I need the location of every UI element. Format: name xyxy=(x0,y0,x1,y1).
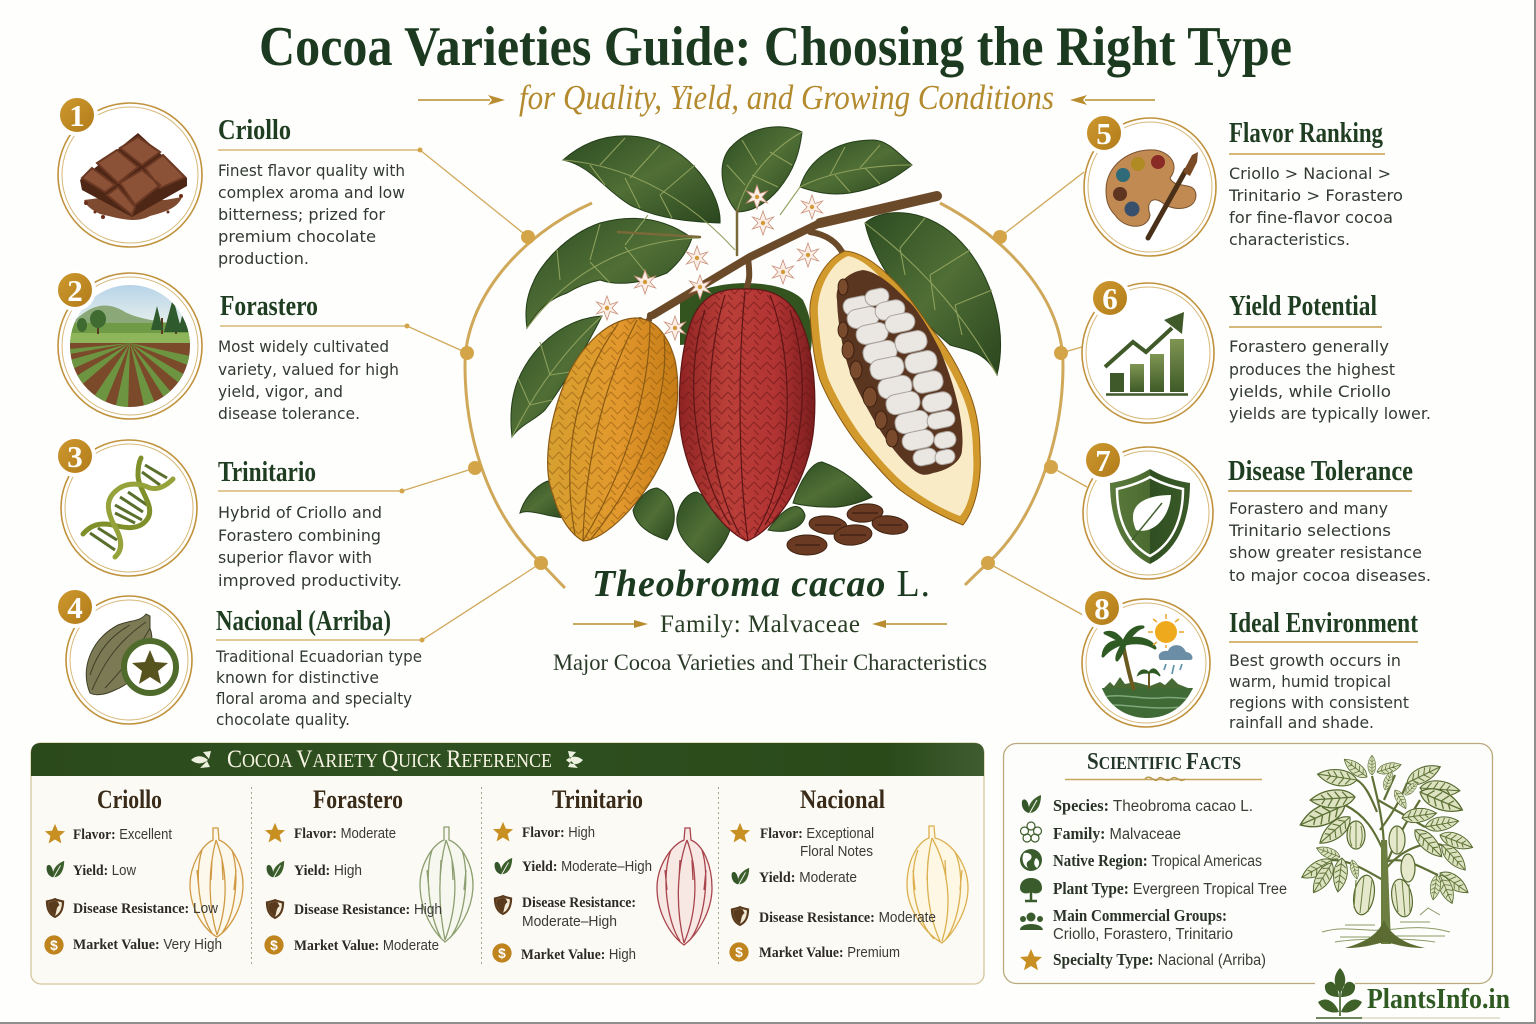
badge 4 xyxy=(56,588,94,626)
heading: SCIENTIFIC FACTS xyxy=(1087,749,1241,775)
description xyxy=(215,647,422,729)
heading: Trinitario xyxy=(218,456,316,488)
description: Criollo > Nacional > xyxy=(1229,164,1391,183)
flowers xyxy=(596,185,822,340)
description xyxy=(1229,337,1431,423)
heading: Criollo xyxy=(218,114,291,146)
description: Finest flavor quality with xyxy=(218,161,405,180)
heading: Nacional (Arriba) xyxy=(216,605,391,637)
badge 6: 6 xyxy=(1102,281,1118,316)
icon: palette in ring xyxy=(1084,118,1216,256)
item 5: Flavor Ranking xyxy=(1084,114,1403,256)
hero illustration: cocoa pods, leaves and branch xyxy=(511,127,1000,563)
description: bitterness; prized for xyxy=(218,205,385,224)
heading: Forastero xyxy=(220,290,318,322)
description: Forastero combining xyxy=(218,526,381,545)
description xyxy=(218,337,399,423)
icon: bar chart with rising arrow in ring xyxy=(1082,283,1214,423)
heading: Yield Potential xyxy=(1229,290,1377,322)
leaf: top right xyxy=(780,140,912,215)
column: Nacional: Floral Notes xyxy=(800,844,873,860)
description: improved productivity. xyxy=(218,571,402,590)
yellow pod xyxy=(548,318,678,541)
description: Trinitario selections xyxy=(1228,521,1391,540)
description: chocolate quality. xyxy=(216,710,350,729)
item 6: Yield Potential xyxy=(1082,279,1431,423)
item 8: Ideal Environment xyxy=(1082,589,1418,732)
badge 1: 1 xyxy=(69,98,85,133)
description: to major cocoa diseases. xyxy=(1229,566,1431,585)
description: premium chocolate xyxy=(218,227,376,246)
fact rows: Criollo, Forastero, Trinitario xyxy=(1053,926,1233,943)
badge 7: 7 xyxy=(1095,443,1111,478)
description: complex aroma and low xyxy=(218,183,405,202)
icon: pod with star medal in ring xyxy=(66,596,192,724)
heading: Ideal Environment xyxy=(1229,607,1418,639)
badge 1 xyxy=(58,96,96,134)
panel: quick reference xyxy=(31,743,984,984)
column: Forastero: Yield: High xyxy=(294,863,362,879)
column: Criollo xyxy=(44,785,222,955)
fact rows: Family: Malvaceae xyxy=(1053,824,1181,843)
fact rows: Plant Type: Evergreen Tropical Tree xyxy=(1053,879,1287,898)
leaf: behind red pod xyxy=(680,283,812,355)
leaves: bottom cluster xyxy=(520,462,872,563)
item 7: Disease Tolerance xyxy=(1083,441,1431,585)
panel header: COCOA VARIETY QUICK REFERENCE xyxy=(227,746,552,773)
item 3: Trinitario xyxy=(56,437,402,590)
subtitle: for Quality, Yield, and Growing Conditions xyxy=(519,78,1054,117)
cocoa beans xyxy=(787,502,909,555)
column: Criollo: Flavor: Excellent xyxy=(73,827,172,843)
description: Forastero and many xyxy=(1229,499,1388,518)
column: Nacional: Flavor: Exceptional xyxy=(760,826,874,842)
panel: scientific facts xyxy=(1004,744,1492,984)
description: Hybrid of Criollo and xyxy=(218,503,382,522)
badge 8 xyxy=(1083,589,1121,627)
description: regions with consistent xyxy=(1229,693,1409,712)
column: Forastero: Flavor: Moderate xyxy=(294,826,396,842)
description: Most widely cultivated xyxy=(218,337,389,356)
description xyxy=(1229,651,1409,732)
column: Trinitario: Yield: Moderate–High xyxy=(522,859,652,875)
column: Forastero: Forastero xyxy=(313,785,403,814)
description xyxy=(1228,164,1403,249)
column: Trinitario: Trinitario xyxy=(552,785,643,814)
fact rows: Native Region: Tropical Americas xyxy=(1053,851,1262,870)
heading xyxy=(1065,749,1262,780)
column: Criollo: Criollo xyxy=(97,785,162,814)
open pod with white beans xyxy=(810,251,980,525)
column: Nacional xyxy=(729,785,936,962)
description: characteristics. xyxy=(1229,230,1350,249)
logo: PlantsInfo.in: PlantsInfo.in xyxy=(1367,983,1510,1015)
heading: Flavor Ranking xyxy=(1229,117,1383,149)
description: superior flavor with xyxy=(218,548,372,567)
badge 3 xyxy=(56,437,94,475)
pod outlines xyxy=(190,826,968,945)
badge 7 xyxy=(1084,441,1122,479)
badge 5 xyxy=(1085,114,1123,152)
item 1: Criollo xyxy=(58,96,405,268)
description: rainfall and shade. xyxy=(1229,713,1374,732)
description: warm, humid tropical xyxy=(1229,672,1391,691)
column: Trinitario: Market Value: High xyxy=(521,947,636,963)
icon: palm, sun and rain in ring xyxy=(1082,599,1210,727)
illustration: cocoa tree xyxy=(1297,755,1475,948)
description: Traditional Ecuadorian type xyxy=(215,647,422,666)
icon: DNA in ring xyxy=(61,440,197,576)
description: yields are typically lower. xyxy=(1229,404,1431,423)
description xyxy=(218,503,402,590)
column: Forastero xyxy=(264,785,442,955)
column: Trinitario xyxy=(492,785,652,963)
icon: leaf shield in ring xyxy=(1083,447,1213,579)
badge 4: 4 xyxy=(67,590,83,625)
badge 6 xyxy=(1091,279,1129,317)
fact rows: Species: Theobroma cacao L. xyxy=(1053,796,1253,815)
icon: chocolate in ring xyxy=(58,103,202,247)
column: Criollo: Market Value: Very High xyxy=(73,937,222,953)
centre caption: Major Cocoa Varieties and Their Characteristics xyxy=(553,650,987,675)
description: Trinitario > Forastero xyxy=(1228,186,1403,205)
title: Cocoa Varieties Guide: Choosing the Right Type xyxy=(259,16,1292,78)
description: yields, while Criollo xyxy=(1229,382,1391,401)
description: variety, valued for high xyxy=(218,360,399,379)
description: for fine-flavor cocoa xyxy=(1229,208,1393,227)
heading: Disease Tolerance xyxy=(1228,455,1413,487)
central ring and connectors xyxy=(216,148,1087,642)
description xyxy=(218,161,405,268)
botanical name: Theobroma cacao L. xyxy=(592,563,930,605)
logo: PlantsInfo.in xyxy=(1315,968,1510,1018)
fact rows xyxy=(1020,795,1287,970)
description: production. xyxy=(218,249,309,268)
panel header xyxy=(31,743,984,776)
fact rows: Specialty Type: Nacional (Arriba) xyxy=(1053,950,1266,969)
description xyxy=(1228,499,1431,585)
description: produces the highest xyxy=(1229,360,1395,379)
description: yield, vigor, and xyxy=(218,382,343,401)
description: floral aroma and specialty xyxy=(216,689,412,708)
description: known for distinctive xyxy=(216,668,379,687)
column: Trinitario: Disease Resistance: xyxy=(522,895,636,911)
item 4: Nacional xyxy=(56,588,422,729)
red pod xyxy=(679,289,815,541)
badge 2: 2 xyxy=(67,273,83,308)
badge 2 xyxy=(56,271,94,309)
family line xyxy=(573,611,947,638)
description: show greater resistance xyxy=(1229,543,1422,562)
description: Forastero generally xyxy=(1229,337,1389,356)
icon: farm field in ring xyxy=(58,273,202,419)
column: Nacional: Yield: Moderate xyxy=(759,870,857,886)
badge 5: 5 xyxy=(1096,116,1112,151)
column: Nacional: Nacional xyxy=(800,785,885,814)
description: disease tolerance. xyxy=(218,404,360,423)
item 2: Forastero xyxy=(56,271,399,423)
description: Best growth occurs in xyxy=(1229,651,1401,670)
family line: Family: Malvaceae xyxy=(660,611,860,638)
column: Trinitario: Moderate–High xyxy=(522,914,617,930)
column: Criollo: Disease Resistance: Low xyxy=(73,901,218,917)
column: Forastero: Disease Resistance: High xyxy=(294,902,442,918)
badge 8: 8 xyxy=(1094,591,1110,626)
leaf: top centre xyxy=(722,127,802,250)
column: Nacional: Disease Resistance: Moderate xyxy=(759,910,936,926)
column: Trinitario: Flavor: High xyxy=(522,825,595,841)
column: Forastero: Market Value: Moderate xyxy=(294,938,439,954)
leaf: right large xyxy=(865,213,1000,375)
branch and twigs xyxy=(618,196,937,322)
badge 3: 3 xyxy=(67,439,83,474)
fact rows: Main Commercial Groups: xyxy=(1053,906,1227,925)
leaf: top left xyxy=(563,136,735,250)
leaf: left middle xyxy=(526,215,700,328)
column: Criollo: Yield: Low xyxy=(73,863,136,879)
leaf: lower left xyxy=(511,316,602,437)
column: Nacional: Market Value: Premium xyxy=(759,945,900,961)
